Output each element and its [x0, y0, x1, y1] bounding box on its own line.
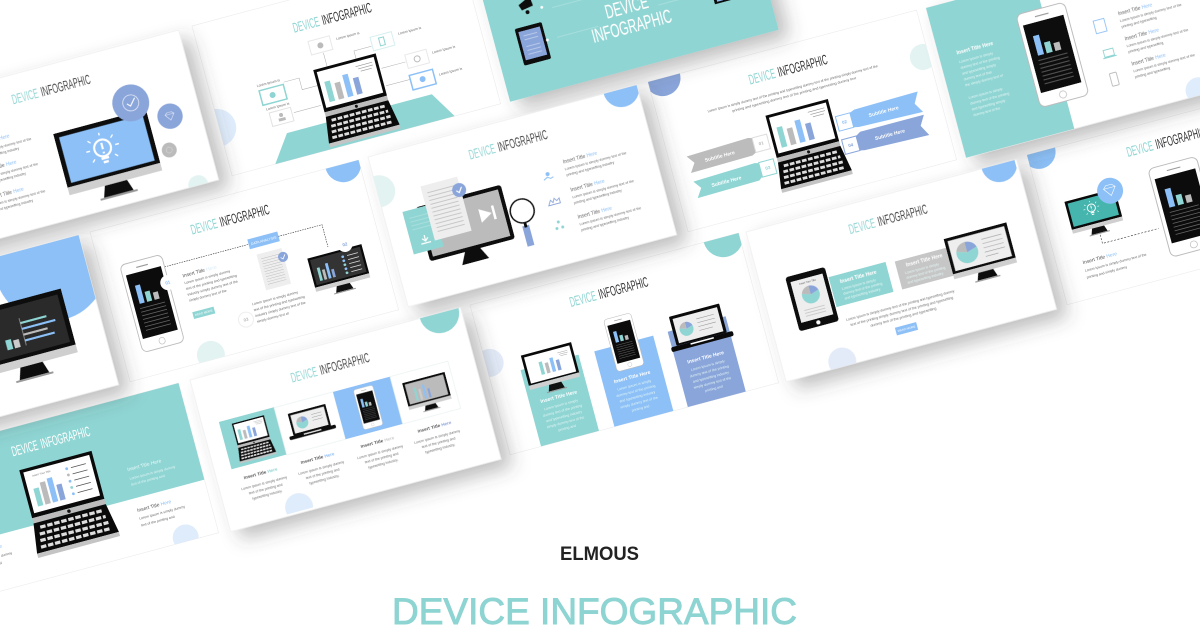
card: laptop on teal	[219, 407, 287, 469]
icon row two	[546, 171, 636, 212]
column: blue	[594, 336, 673, 427]
slide title: INFOGRAPHIC	[876, 201, 929, 229]
caption three: typesetting industry.	[368, 458, 399, 470]
text block one	[182, 266, 238, 302]
panel text	[956, 40, 1013, 117]
icon row two	[1099, 20, 1190, 61]
icon row three: Insert Title Here	[577, 206, 613, 221]
gray box: dummy text of the printing	[906, 266, 946, 280]
teal side panel	[926, 0, 1074, 158]
icon row one: Insert Title Here	[1117, 2, 1153, 17]
panel: teal laptop list slide	[0, 382, 219, 592]
document with check	[256, 248, 291, 290]
text block one: Insert Title Here	[182, 264, 218, 279]
panel text: and typesetting simply	[971, 99, 1006, 112]
caption one: Insert Title Here	[243, 466, 278, 480]
box: camera: Lorem Ipsum is	[256, 78, 281, 88]
icon row three: Lorem Ipsum is simply dummy text of the	[579, 206, 642, 226]
blue half circle	[326, 160, 360, 182]
teal box: dummy text of the printing	[843, 282, 883, 296]
column: blue: and typesetting industry	[619, 390, 656, 404]
slide title: INFOGRAPHIC	[218, 201, 271, 230]
ribbon: periwinkle 04: 04	[848, 142, 854, 148]
box: user: Lorem Ipsum is	[266, 101, 290, 112]
description text: dummy text of the printing and typesetting	[870, 306, 937, 328]
column: blue: dummy text of the printing	[616, 384, 656, 398]
laptop with chart	[310, 52, 401, 147]
icon row three: printing and typesetting	[1135, 66, 1171, 79]
teal trapezoid base	[275, 94, 454, 164]
caption four: Lorem Ipsum is simply dummy	[414, 429, 461, 445]
text block two: Lorem Ipsum is simply dummy	[252, 290, 299, 306]
blue half circle	[977, 142, 1021, 186]
caption three: Lorem Ipsum is simply dummy	[357, 444, 404, 460]
ribbon: teal 03	[693, 158, 778, 198]
text block one: text of the printing and typesetting	[186, 274, 237, 291]
button: READ MORE	[194, 309, 213, 317]
text block one: simply dummy text of the	[189, 289, 227, 303]
ribbon: blue 02	[835, 92, 923, 134]
column: teal: Insert Title Here	[540, 389, 578, 405]
white text right	[127, 455, 178, 487]
monitor	[416, 185, 518, 273]
caption two	[295, 449, 348, 488]
phone	[120, 254, 185, 353]
icon row three: Lorem Ipsum is simply dummy text of the	[1133, 53, 1195, 73]
slide title: DEVICE	[189, 215, 219, 238]
column: periwinkle: Insert Title Here	[687, 350, 725, 366]
ribbon: gray 01	[686, 133, 771, 173]
slide title: DEVICE	[10, 85, 40, 107]
magnifier	[508, 196, 543, 249]
large laptop with list: Insert Your Title	[32, 469, 51, 478]
megaphone icon	[517, 0, 544, 16]
caption four	[411, 418, 464, 457]
dark monitor	[307, 244, 372, 299]
badge 03	[238, 312, 254, 328]
icon row three: printing and typesetting industry	[581, 216, 630, 232]
gray box: Insert Title Here	[905, 253, 944, 269]
button	[895, 322, 918, 335]
column: teal: dummy text of the printing	[543, 404, 583, 418]
ribbon: periwinkle 04	[841, 115, 929, 157]
slide title	[847, 201, 929, 237]
slide title	[568, 273, 650, 310]
cover title	[584, 0, 674, 48]
slide title	[1125, 123, 1200, 160]
panel: ribbons slide	[640, 0, 963, 232]
monitor	[521, 342, 582, 397]
gray box: Lorem Ipsum is simply	[905, 262, 939, 275]
caption two: Lorem Ipsum is simply dummy	[298, 460, 345, 476]
slide title: DEVICE	[291, 13, 321, 36]
check circle	[108, 80, 153, 126]
badge 01: 01	[165, 279, 171, 286]
dark monitor	[0, 288, 81, 391]
white text right: text of the printing and	[131, 474, 165, 487]
phone	[1148, 156, 1200, 257]
badge 02: 02	[342, 241, 348, 248]
box: top left: Lorem Ipsum is	[336, 31, 360, 41]
monitor with pie	[944, 222, 1019, 288]
text block: printing and simply dummy	[1086, 265, 1128, 280]
badge 02	[340, 242, 352, 252]
icon row one	[540, 143, 628, 183]
icon row one: printing and typesetting	[1121, 16, 1157, 29]
panel: monitor and phone slide	[1018, 67, 1200, 306]
caption four: Insert Title Here	[417, 420, 452, 434]
panel text: dummy text of the printing	[970, 91, 1010, 106]
tablet icon	[514, 21, 554, 66]
button: READ MORE	[897, 324, 916, 333]
text block: Lorem Ipsum is simply dummy text of the	[1084, 253, 1147, 273]
panel text: dummy text of that	[963, 70, 992, 82]
icon row one: Insert Title Here	[562, 151, 598, 166]
intro text: printing and typesetting dummy text of the printing and typesetting dummy text	[732, 76, 857, 113]
monitor with bulb	[53, 109, 166, 208]
box: user	[266, 101, 294, 127]
slide title	[10, 423, 92, 459]
panel text: Lorem Ipsum is simply	[968, 87, 1003, 100]
card: phone on blue	[333, 377, 403, 439]
column: blue: simply dummy text of the	[620, 396, 658, 410]
icon row two: printing and typesetting industry	[573, 188, 622, 205]
intro text: Lorem Ipsum is simply dummy text of the printing and typesetting dummy text of the printing simply dummy text of the	[707, 64, 878, 113]
caption four: typesetting industry.	[425, 443, 456, 454]
teal box: Insert Title Here	[839, 270, 878, 285]
ribbon: gray 01: Subtitle Here	[704, 150, 736, 164]
slide title: INFOGRAPHIC	[496, 126, 549, 155]
slide title: INFOGRAPHIC	[776, 51, 829, 80]
ribbon: blue 02: Subtitle Here	[868, 105, 900, 119]
panel text: dummy text of the	[973, 106, 1001, 117]
teal box	[829, 262, 894, 307]
slide title: DEVICE	[747, 65, 777, 88]
ribbon: periwinkle 04: Subtitle Here	[874, 128, 906, 142]
slide title	[289, 349, 371, 386]
slide title: DEVICE	[847, 215, 877, 237]
caption two: text of the printing and	[306, 467, 340, 480]
pale blue circle	[825, 344, 859, 379]
dashed connector	[1100, 220, 1158, 243]
icon row three	[1108, 45, 1197, 86]
gray circle	[160, 141, 178, 159]
pale teal circle	[360, 172, 399, 211]
caption three: text of the printing and	[364, 452, 399, 464]
column: teal: simply dummy text of the	[546, 415, 585, 429]
monitor icon	[709, 0, 743, 4]
panel text: Insert Title Here	[956, 41, 994, 56]
description text: Lorem Ipsum is simply dummy text of the printing and typesetting dummy	[846, 289, 955, 322]
box: network: Lorem Ipsum is	[439, 67, 463, 77]
icon row two: Lorem Ipsum is simply dummy text of the	[572, 179, 634, 199]
caption one	[238, 465, 291, 503]
column: periwinkle: dummy text of the printing	[689, 364, 729, 378]
column: blue: printing and	[631, 404, 650, 413]
blue half circle	[1018, 131, 1059, 173]
box: right: Lorem Ipsum is	[432, 45, 456, 55]
tablet with pie: Insert Your Title	[799, 278, 817, 286]
icon row two: Lorem Ipsum is simply dummy text of the	[1126, 28, 1189, 48]
pale teal circle	[910, 44, 932, 70]
text block two: text of the printing and typesetting	[253, 295, 305, 312]
pale blue circle	[214, 109, 236, 146]
column: blue: Lorem Ipsum is simply	[617, 379, 652, 392]
badge 01	[160, 275, 171, 290]
column: periwinkle: Lorem Ipsum is simply	[690, 359, 725, 372]
panel: lightbulb monitor slide	[0, 30, 221, 261]
teal box: and typesetting industry	[844, 287, 881, 301]
box: top left	[308, 32, 360, 56]
pale blue circle	[1183, 74, 1200, 106]
laptop with chart	[762, 98, 853, 193]
open laptop	[663, 302, 734, 352]
connector lines	[284, 46, 410, 113]
caption three: Insert Title Here	[360, 435, 395, 449]
caption one: typesetting industry.	[252, 489, 283, 501]
slide title: DEVICE	[10, 437, 40, 459]
slide title: INFOGRAPHIC	[597, 273, 650, 302]
column: periwinkle: printing and	[705, 384, 723, 393]
white text right: Lorem Ipsum is simply dummy	[129, 465, 176, 481]
teal half circle	[415, 289, 464, 338]
text block	[1082, 244, 1149, 280]
gem circle	[1094, 175, 1126, 207]
slide title	[467, 126, 549, 163]
column: teal: and typesetting industry	[546, 410, 583, 423]
caption three	[354, 434, 407, 472]
icon row one	[1092, 0, 1184, 36]
slide title	[748, 54, 828, 84]
blue half circle	[599, 67, 643, 111]
phone	[1016, 2, 1089, 108]
icon row three: Insert Title Here	[1131, 53, 1167, 68]
panel: three columns slide	[455, 213, 783, 457]
ribbon: teal 03: 03	[765, 165, 771, 171]
panel text: Lorem Ipsum is simply	[959, 51, 994, 64]
dark text right: Lorem Ipsum is simply dummy	[139, 505, 186, 521]
caption one: text of the printing and	[249, 483, 283, 496]
teal banner	[0, 383, 204, 534]
icon row one: Lorem Ipsum is simply dummy text of the	[1120, 3, 1182, 23]
slide title	[292, 2, 372, 33]
text block one: industry simply dummy text of the	[187, 279, 238, 297]
slide title: DEVICE	[289, 363, 319, 386]
icon row one: Lorem Ipsum is simply dummy text of the	[564, 151, 627, 171]
pale teal circle	[186, 173, 211, 197]
panel: four device cards slide	[185, 288, 503, 539]
ribbon: blue 02: 02	[841, 119, 848, 125]
panel: dark monitor slide	[0, 197, 139, 457]
pale blue circle	[282, 490, 316, 524]
slide title	[10, 71, 92, 107]
box: right	[404, 46, 456, 69]
box: network	[408, 68, 462, 91]
dark text right	[136, 496, 188, 528]
phone	[603, 313, 644, 372]
icon row two: Insert Title Here	[570, 179, 606, 194]
description text: text of the printing simply dummy text of the printing and typesetting	[850, 296, 954, 327]
pale teal circle	[197, 341, 225, 363]
caption one: Lorem Ipsum is simply dummy	[241, 475, 288, 491]
gray box	[895, 248, 954, 290]
panel: phone data flow slide	[90, 160, 399, 382]
data tag	[247, 232, 280, 249]
column: periwinkle	[668, 316, 746, 407]
slide title: INFOGRAPHIC	[39, 71, 92, 100]
gray box: and typesetting industry	[907, 271, 944, 285]
ribbon: teal 03: Subtitle Here	[711, 175, 742, 189]
panel text: dummy text of the printing	[960, 56, 1000, 70]
text block two: industry simply dummy text of the	[255, 301, 306, 318]
box: top right	[370, 26, 422, 52]
slide title: INFOGRAPHIC	[318, 349, 371, 378]
box: camera	[256, 78, 287, 106]
text block one: Lorem Ipsum is simply dummy	[184, 269, 231, 285]
slide title	[190, 204, 270, 234]
dashed connector	[165, 224, 328, 267]
card: monitor	[390, 361, 461, 424]
gem circle	[154, 101, 186, 132]
icon row three	[553, 198, 643, 239]
pale blue circle	[473, 346, 507, 380]
text block: Insert Title Here	[1082, 251, 1118, 266]
teal monitor with bulb	[1064, 188, 1125, 241]
column: blue: Insert Title Here	[613, 370, 651, 385]
large laptop with list	[15, 449, 120, 558]
panel text: the simply dummy text of	[965, 73, 1003, 87]
slide title: DEVICE	[568, 287, 598, 310]
icon row one: printing and typesetting industry	[566, 160, 615, 177]
panel: document and magnifier slide	[350, 67, 679, 310]
white text right: Insert Title Here	[127, 458, 162, 473]
teal half circle	[699, 213, 748, 262]
tablet with pie	[785, 267, 839, 332]
column: periwinkle: and typesetting industry	[693, 370, 729, 384]
text block two	[252, 291, 306, 323]
brand name: ELMOUS	[560, 544, 639, 565]
text block two: simply dummy text of	[256, 311, 289, 324]
panel: tablet and monitor slide	[741, 142, 1059, 390]
panel: teal cover slide	[470, 0, 780, 102]
column: teal: printing and	[558, 424, 577, 432]
button	[192, 307, 215, 319]
ribbon: gray 01: 01	[758, 140, 765, 146]
dark text right: text of the printing and	[141, 515, 175, 528]
teal box: Lorem Ipsum is simply	[842, 278, 876, 291]
pale blue circle	[172, 524, 199, 544]
column: teal: Lorem Ipsum is simply	[544, 398, 579, 411]
document with check	[420, 175, 477, 241]
column: teal	[521, 355, 599, 446]
panel: laptop diagram slide	[172, 0, 501, 182]
slide title: DEVICE	[1125, 137, 1155, 160]
slide title: DEVICE	[467, 140, 497, 163]
dark text left	[0, 541, 15, 574]
dark text right: Insert Title Here	[136, 499, 172, 514]
caption two: Insert Title Here	[300, 451, 335, 465]
data tag: DATA ANALYSIS	[251, 235, 278, 246]
card: open laptop	[274, 392, 346, 455]
panel: teal phone slide	[926, 0, 1200, 165]
panel text: and typesetting simply	[962, 63, 996, 76]
text rows	[0, 128, 47, 215]
blue circle	[0, 197, 119, 334]
periwinkle half circle	[648, 74, 680, 96]
caption two: typesetting industry.	[309, 474, 340, 486]
connector lines	[549, 0, 712, 37]
icon row two: printing and typesetting	[1128, 41, 1164, 54]
teal file	[402, 204, 444, 254]
icon row two: Insert Title Here	[1124, 27, 1160, 42]
badge 03: 03	[243, 316, 250, 323]
column: periwinkle: simply dummy text of the	[693, 376, 732, 390]
caption four: text of the printing and	[421, 436, 456, 449]
slide title: INFOGRAPHIC	[38, 423, 92, 452]
box: top right: Lorem Ipsum is	[398, 26, 422, 36]
